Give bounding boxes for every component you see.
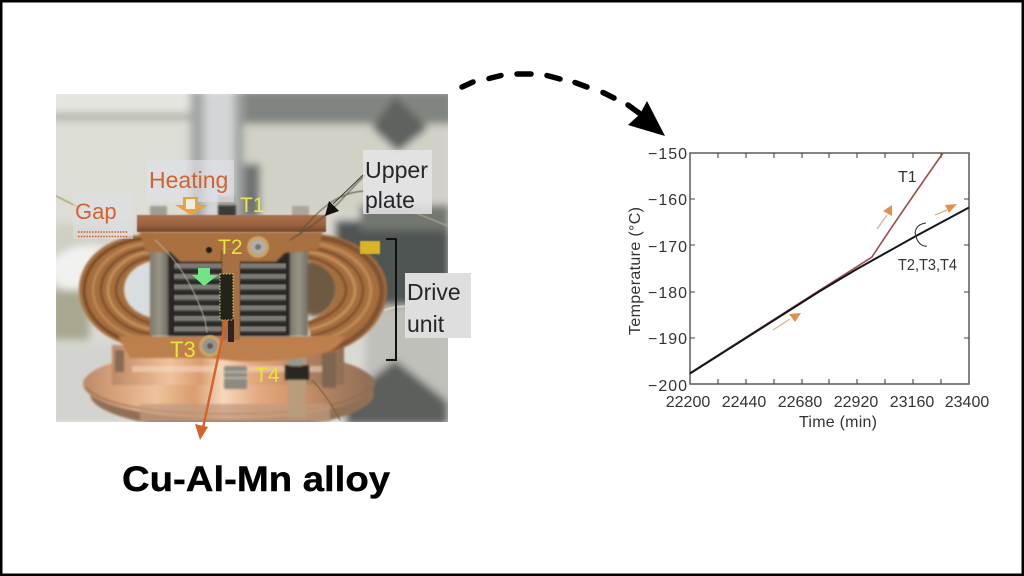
label: T3: T3 bbox=[170, 337, 196, 362]
arrow to upper plate bbox=[325, 175, 363, 216]
label: Upper plate bbox=[363, 150, 432, 214]
right coil bbox=[306, 234, 387, 354]
x-axis labels: 22440 bbox=[722, 394, 766, 411]
y-axis title: Temperature (°C) bbox=[627, 207, 644, 335]
bracket: drive unit bbox=[386, 239, 396, 360]
arrow: T2-T4 trend bbox=[935, 204, 957, 215]
label: Drive unit: unit bbox=[407, 311, 445, 337]
alloy sample highlight bbox=[220, 274, 233, 320]
chart: temperature vs time bbox=[627, 146, 989, 431]
upper plate bbox=[137, 215, 326, 232]
label: Gap bbox=[73, 193, 133, 239]
label: T1: T1 bbox=[240, 194, 265, 217]
drive label backing inside photo bbox=[405, 273, 448, 338]
y-axis labels: −160 bbox=[648, 192, 687, 209]
photo background bbox=[50, 90, 455, 425]
base plate bbox=[83, 345, 375, 430]
line: T2, T3, T4 bbox=[690, 208, 969, 374]
x-axis labels: 22200 bbox=[666, 394, 710, 411]
plot frame bbox=[690, 153, 969, 384]
label: Upper plate: plate bbox=[365, 187, 415, 213]
arrow: lower trend bbox=[773, 313, 801, 330]
label: T4: T4 bbox=[255, 364, 280, 387]
line: T1 bbox=[690, 153, 943, 373]
left coil bbox=[79, 234, 152, 348]
label: Heating bbox=[147, 160, 234, 202]
label: Gap: Gap bbox=[75, 199, 117, 224]
label: Drive unit bbox=[405, 273, 471, 338]
axis ticks bbox=[690, 153, 969, 384]
label: Upper plate: Upper bbox=[365, 157, 428, 183]
x-axis title: Time (min) bbox=[799, 414, 877, 431]
y-axis labels: −150 bbox=[648, 146, 687, 163]
bolt near T3 bbox=[199, 335, 221, 357]
label: T2: T2 bbox=[218, 236, 243, 259]
springs bbox=[174, 262, 286, 335]
y-axis labels: −200 bbox=[648, 378, 687, 395]
heading: Cu-Al-Mn alloy: Cu-Al-Mn alloy bbox=[122, 460, 391, 499]
upper block bbox=[139, 232, 323, 262]
x-axis labels: 23160 bbox=[890, 394, 934, 411]
center copper column bbox=[222, 250, 240, 340]
arrow: dashed curved arrow bbox=[462, 74, 665, 136]
y-axis labels: −190 bbox=[648, 331, 687, 348]
thermocouple wires bbox=[56, 175, 448, 420]
arrow: T1 trend bbox=[877, 205, 892, 229]
arrow: orange leader to alloy bbox=[195, 320, 226, 440]
label: Drive unit: Drive bbox=[407, 279, 461, 305]
panel: photo of drive unit bbox=[50, 90, 455, 430]
label: T2,T3,T4: T2,T3,T4 bbox=[898, 257, 957, 274]
coil holes bbox=[123, 260, 337, 316]
x-axis labels: 22920 bbox=[834, 394, 878, 411]
y-axis labels bbox=[648, 146, 687, 395]
y-axis labels: −180 bbox=[648, 285, 687, 302]
bolt near T2 bbox=[206, 236, 269, 258]
x-axis labels: 23400 bbox=[945, 394, 989, 411]
yellow connector bbox=[360, 241, 380, 254]
gap dotted lines bbox=[78, 232, 128, 236]
icon: green arrow bbox=[192, 268, 218, 286]
label: Heating: Heating bbox=[149, 167, 228, 193]
x-axis labels: 22680 bbox=[778, 394, 822, 411]
x-axis labels bbox=[666, 394, 989, 411]
bracket symbol bbox=[915, 223, 927, 246]
y-axis labels: −170 bbox=[648, 239, 687, 256]
support posts bbox=[150, 248, 308, 336]
bolts bbox=[150, 196, 309, 418]
label: T1: T1 bbox=[898, 169, 917, 186]
icon: heating arrow bbox=[175, 197, 208, 215]
lower block bbox=[118, 336, 345, 361]
